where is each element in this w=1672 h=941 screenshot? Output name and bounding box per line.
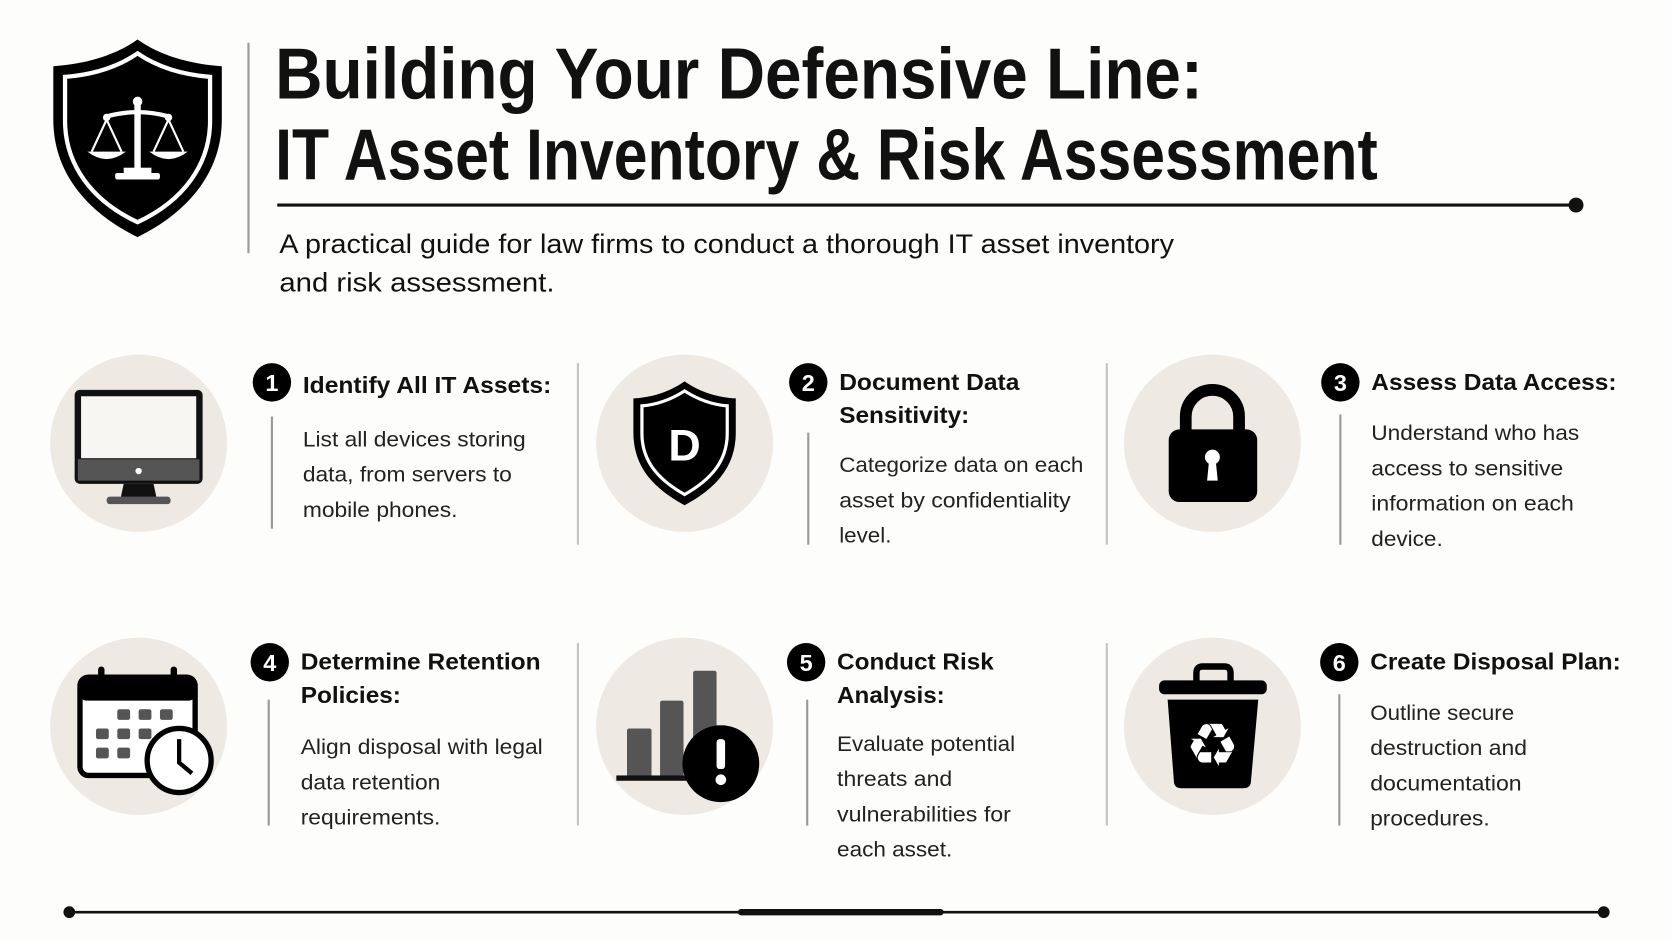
icon: recycle bin — [1124, 638, 1301, 815]
panel 4: retention: Align disposal with legal — [301, 735, 543, 759]
panel 5: risk analysis — [596, 638, 1015, 862]
panel 6: disposal plan: procedures. — [1370, 807, 1490, 831]
title: Building Your Defensive Line: — [275, 33, 1203, 114]
subtitle: and risk assessment. — [279, 268, 554, 298]
panel 1: identify assets: List all devices storing — [303, 427, 526, 451]
logo: shield with scales — [53, 40, 222, 237]
subtitle — [279, 229, 1175, 298]
title: IT Asset Inventory & Risk Assessment — [275, 114, 1378, 195]
panel 3: data access: Understand who has — [1371, 421, 1579, 445]
subtitle: A practical guide for law firms to conduct a thorough IT asset inventory — [279, 229, 1175, 259]
panel 6: disposal plan: Create Disposal Plan: — [1370, 649, 1621, 675]
panel 5: risk analysis: 5 — [800, 650, 813, 676]
icon: shield D: D — [668, 420, 701, 470]
panel 1: identify assets — [50, 355, 551, 532]
panel 5: risk analysis: threats and — [837, 767, 952, 791]
title — [275, 33, 1378, 195]
icon: lock — [1124, 355, 1301, 532]
panel 2: document sensitivity: Document Data — [839, 369, 1020, 395]
panel 3: data access: 3 — [1334, 370, 1347, 396]
icon: monitor — [50, 355, 227, 532]
icon: calendar with clock — [50, 638, 227, 815]
panel 1: identify assets: data, from servers to — [303, 463, 512, 487]
panel 5: risk analysis: Analysis: — [837, 682, 945, 708]
panel 2: document sensitivity: 2 — [802, 370, 815, 396]
panel 2: document sensitivity: Categorize data on each — [839, 453, 1083, 477]
panel 4: retention: Policies: — [301, 682, 401, 708]
panel 3: data access: device. — [1371, 527, 1443, 551]
panel 4: retention — [50, 638, 543, 830]
panel 6: disposal plan — [1124, 638, 1621, 831]
panel 1: identify assets: mobile phones. — [303, 498, 457, 522]
icon: recycle bin: ♻ — [1186, 712, 1239, 781]
panel 2: document sensitivity: Sensitivity: — [839, 402, 969, 428]
panel 5: risk analysis: Evaluate potential — [837, 732, 1015, 756]
panel 2: document sensitivity — [596, 355, 1083, 548]
panel 6: disposal plan: Outline secure — [1370, 701, 1514, 725]
panel 3: data access: information on each — [1371, 492, 1574, 516]
panel 4: retention: requirements. — [301, 806, 440, 830]
panel 4: retention: Determine Retention — [301, 649, 541, 675]
panel 5: risk analysis: vulnerabilities for — [837, 802, 1011, 826]
bottom timeline line — [63, 906, 1610, 918]
panel 3: data access: access to sensitive — [1371, 456, 1563, 480]
panel 4: retention: 4 — [263, 650, 276, 676]
panel 5: risk analysis: each asset. — [837, 838, 952, 862]
icon: bar chart with alert — [596, 638, 773, 815]
panel 6: disposal plan: 6 — [1333, 650, 1346, 676]
panel 1: identify assets: Identify All IT Assets: — [303, 372, 551, 398]
panel 2: document sensitivity: level. — [839, 524, 891, 548]
panel 1: identify assets: 1 — [265, 370, 278, 396]
panel 4: retention: data retention — [301, 770, 440, 794]
icon: shield D — [596, 355, 773, 532]
panel 6: disposal plan: destruction and — [1370, 736, 1527, 760]
panel 5: risk analysis: Conduct Risk — [837, 649, 995, 675]
panel 6: disposal plan: documentation — [1370, 771, 1522, 795]
title underline with dot — [277, 198, 1583, 213]
panel 3: data access — [1124, 355, 1617, 551]
panel 3: data access: Assess Data Access: — [1371, 369, 1617, 395]
panel 2: document sensitivity: asset by confidentiality — [839, 488, 1071, 512]
